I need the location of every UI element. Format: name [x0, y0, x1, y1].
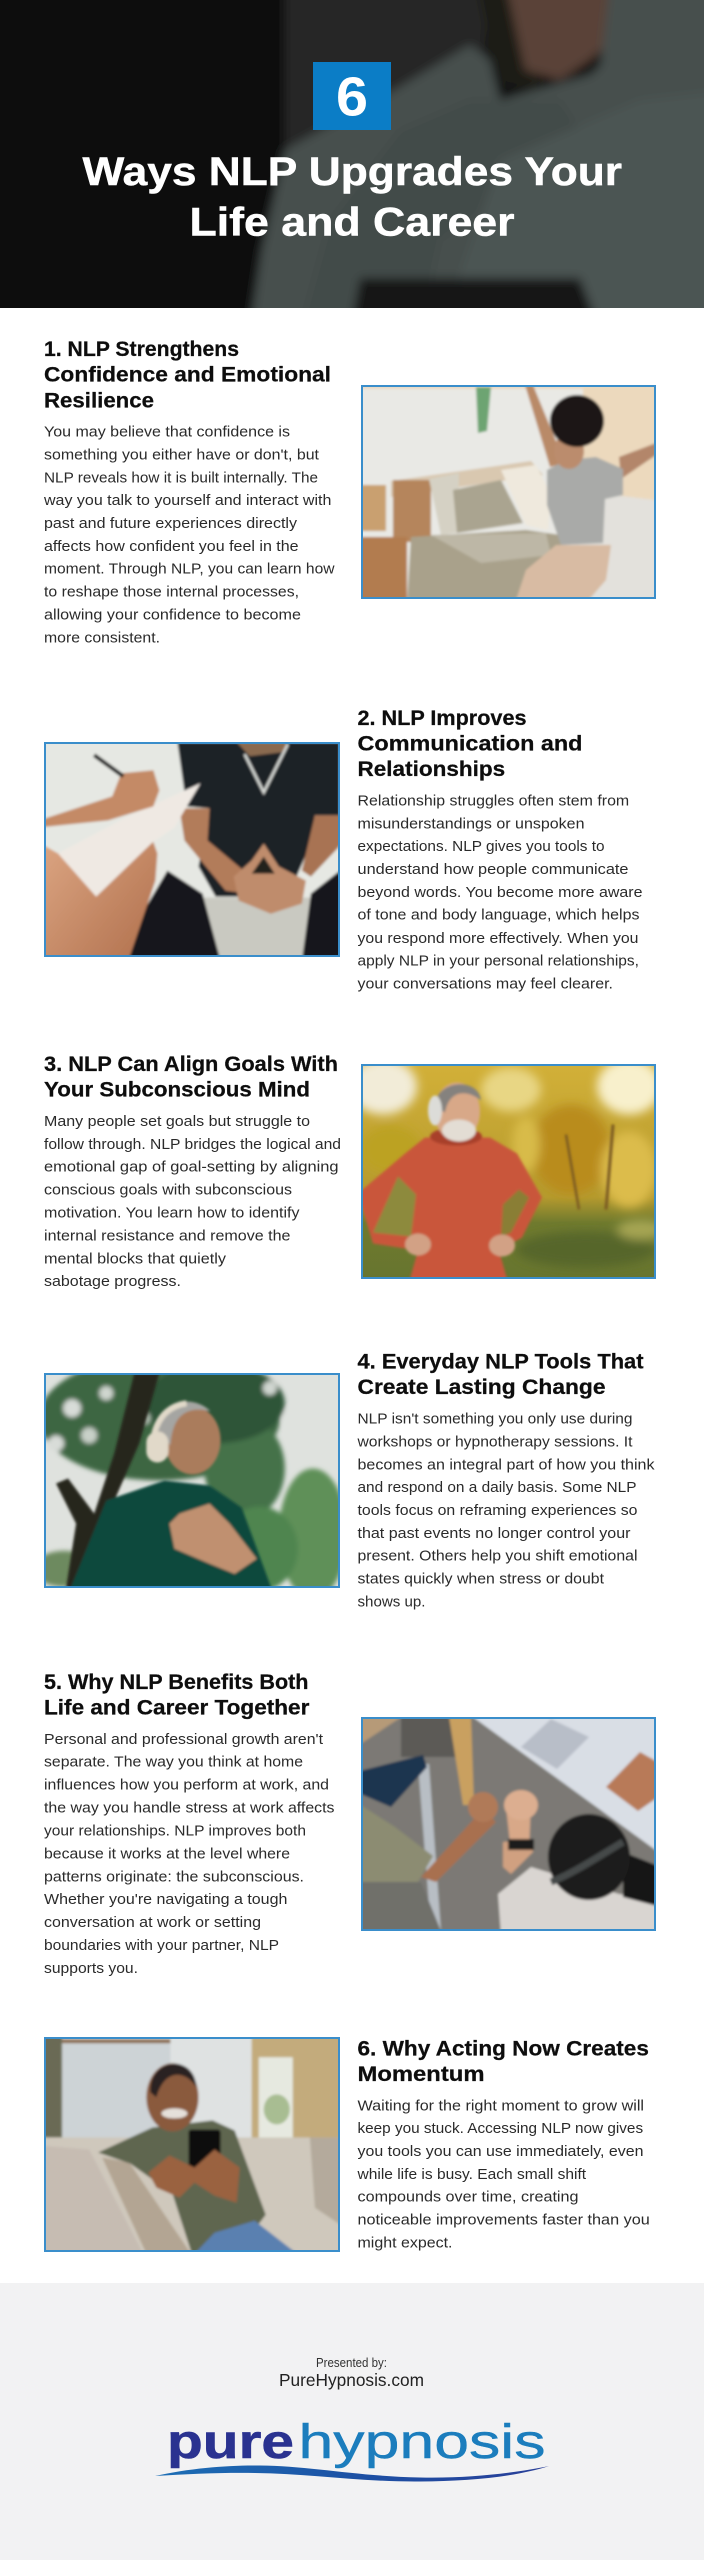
- logo: purehypnosis: [155, 2416, 549, 2482]
- heading 3: 3. NLP Can Align Goals With: [44, 1052, 338, 1076]
- body text 1: moment. Through NLP, you can learn how: [44, 562, 335, 578]
- body text 4: [356, 1412, 655, 1611]
- photo: man with headphones, hands on chest: [34, 1356, 347, 1599]
- body text 3: Many people set goals but struggle to: [44, 1114, 310, 1130]
- body text 1: past and future experiences directly: [44, 516, 298, 532]
- body text 5: [44, 1732, 334, 1977]
- presented by text: Presented by:: [316, 2356, 387, 2370]
- body text 2: Relationship struggles often stem from: [358, 793, 629, 809]
- body text 4: present. Others help you shift emotional: [358, 1549, 638, 1565]
- heading 4: 4. Everyday NLP Tools That: [358, 1350, 644, 1374]
- footer panel: [0, 2283, 704, 2560]
- panel: section 1: [43, 337, 663, 646]
- heading 3: [44, 1052, 338, 1101]
- photo: man in orange hoodie outdoors: [349, 1058, 665, 1282]
- heading 4: [358, 1350, 644, 1399]
- body text 5: Whether you're navigating a tough: [44, 1892, 287, 1908]
- body text 3: mental blocks that quietly: [44, 1251, 227, 1267]
- heading 1: Confidence and Emotional: [44, 363, 331, 387]
- body text 6: compounds over time, creating: [358, 2190, 578, 2206]
- heading 4: Create Lasting Change: [358, 1375, 606, 1399]
- body text 3: internal resistance and remove the: [44, 1228, 290, 1244]
- body text 1: allowing your confidence to become: [44, 608, 301, 624]
- body text 1: NLP reveals how it is built internally. The: [44, 470, 318, 486]
- heading 6: [358, 2036, 649, 2086]
- header photo: woman in grey hoodie: [0, 0, 704, 308]
- body text 2: [358, 793, 642, 993]
- heading 6: 6. Why Acting Now Creates: [358, 2036, 649, 2060]
- body text 5: separate. The way you think at home: [44, 1755, 303, 1771]
- heading 2: Relationships: [358, 757, 505, 781]
- body text 3: [44, 1114, 341, 1290]
- body text 5: patterns originate: the subconscious.: [44, 1869, 304, 1885]
- heading 2: Communication and: [358, 731, 582, 755]
- body text 6: [356, 2098, 650, 2251]
- body text 1: You may believe that confidence is: [44, 425, 290, 441]
- body text 2: beyond words. You become more aware: [358, 885, 642, 901]
- body text 1: to reshape those internal processes,: [44, 585, 299, 601]
- body text 2: you respond more effectively. When you: [358, 931, 638, 947]
- body text 6: might expect.: [358, 2235, 452, 2251]
- title: Ways NLP Upgrades Your: [82, 150, 622, 194]
- website text: PureHypnosis.com: [279, 2370, 424, 2390]
- panel: section 5: [44, 1670, 661, 1977]
- body text 6: while life is busy. Each small shift: [356, 2167, 586, 2183]
- title: [82, 150, 622, 244]
- body text 3: follow through. NLP bridges the logical and: [44, 1137, 341, 1153]
- body text 5: boundaries with your partner, NLP: [44, 1938, 279, 1954]
- body text 1: affects how confident you feel in the: [44, 539, 299, 555]
- photo: therapy session hands: [39, 737, 345, 962]
- heading 3: Your Subconscious Mind: [44, 1077, 310, 1101]
- body text 4: becomes an integral part of how you think: [358, 1457, 655, 1473]
- heading 1: 1. NLP Strengthens: [44, 337, 239, 361]
- body text 2: your conversations may feel clearer.: [358, 977, 613, 993]
- panel: section 2: [39, 706, 643, 993]
- body text 4: workshops or hypnotherapy sessions. It: [356, 1434, 632, 1450]
- title: Life and Career: [190, 200, 514, 244]
- body text 1: something you either have or don't, but: [44, 448, 319, 464]
- body text 2: expectations. NLP gives you tools to: [358, 839, 604, 855]
- body text 5: Personal and professional growth aren't: [44, 1732, 323, 1748]
- body text 5: conversation at work or setting: [44, 1915, 261, 1931]
- body text 1: way you talk to yourself and interact with: [43, 493, 331, 509]
- logo: purehypnosis: hypnosis: [298, 2416, 546, 2469]
- heading 2: [358, 706, 582, 781]
- header banner: [0, 0, 704, 330]
- body text 5: your relationships. NLP improves both: [44, 1823, 306, 1839]
- logo: purehypnosis: pure: [167, 2416, 294, 2469]
- body text 4: shows up.: [358, 1595, 426, 1611]
- photo: overhead fist bump at desk: [356, 1712, 661, 1936]
- number badge: 6: [336, 66, 368, 128]
- body text 2: misunderstandings or unspoken: [358, 816, 584, 832]
- body text 4: NLP isn't something you only use during: [358, 1412, 632, 1428]
- number badge: [313, 62, 391, 130]
- body text 4: states quickly when stress or doubt: [358, 1572, 604, 1588]
- body text 6: you tools you can use immediately, even: [358, 2144, 644, 2160]
- body text 6: keep you stuck. Accessing NLP now gives: [358, 2121, 643, 2137]
- heading 6: Momentum: [358, 2062, 484, 2086]
- panel: section 3: [44, 1052, 665, 1290]
- body text 5: supports you.: [44, 1961, 138, 1977]
- photo: woman stretching on bed: [356, 380, 663, 604]
- body text 5: the way you handle stress at work affects: [44, 1801, 334, 1817]
- body text 6: Waiting for the right moment to grow will: [358, 2098, 644, 2114]
- heading 5: [44, 1670, 310, 1719]
- heading 2: 2. NLP Improves: [358, 706, 527, 730]
- body text 1: [43, 425, 335, 646]
- heading 5: 5. Why NLP Benefits Both: [44, 1670, 308, 1694]
- body text 3: motivation. You learn how to identify: [44, 1205, 300, 1221]
- body text 4: and respond on a daily basis. Some NLP: [358, 1480, 636, 1496]
- body text 3: emotional gap of goal-setting by aligning: [44, 1160, 339, 1176]
- heading 1: [44, 337, 331, 412]
- body text 3: conscious goals with subconscious: [44, 1183, 292, 1199]
- body text 3: sabotage progress.: [44, 1274, 181, 1290]
- panel: section 4: [34, 1350, 655, 1611]
- heading 5: Life and Career Together: [44, 1695, 310, 1719]
- body text 6: noticeable improvements faster than you: [358, 2213, 650, 2229]
- body text 2: apply NLP in your personal relationships,: [358, 954, 639, 970]
- body text 4: tools focus on reframing experiences so: [358, 1503, 638, 1519]
- body text 1: more consistent.: [44, 630, 160, 646]
- body text 5: influences how you perform at work, and: [44, 1778, 329, 1794]
- panel: section 6: [39, 2032, 650, 2257]
- body text 4: that past events no longer control your: [358, 1526, 631, 1542]
- body text 2: of tone and body language, which helps: [358, 908, 640, 924]
- photo: man smiling at phone on sofa: [39, 2032, 345, 2257]
- heading 1: Resilience: [44, 388, 154, 412]
- body text 5: because it works at the level where: [44, 1846, 290, 1862]
- body text 2: understand how people communicate: [358, 862, 628, 878]
